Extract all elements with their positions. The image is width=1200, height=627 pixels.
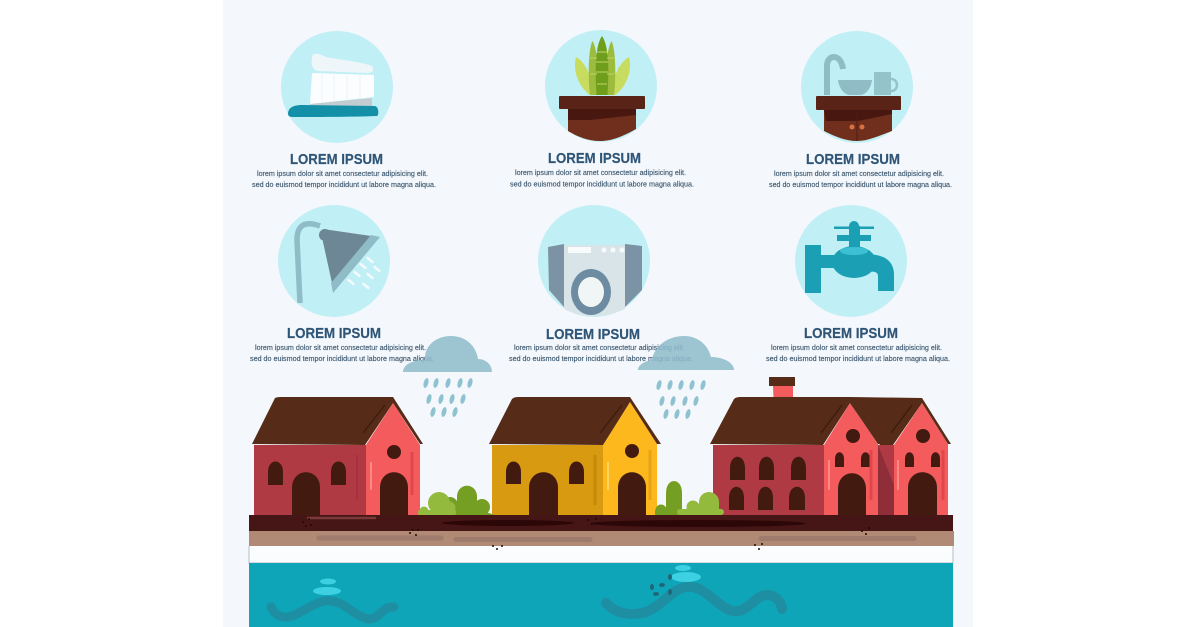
bushes: left [418, 486, 495, 516]
water: underground reservoir [249, 563, 953, 627]
icon: kitchen sink [801, 31, 913, 143]
text block: item 3 [769, 151, 952, 189]
droplet: right upper [675, 565, 691, 571]
text block: item 5: lorem ipsum dolor sit amet consectetur adipisicing elit. [514, 343, 685, 352]
icon: water tap [795, 205, 907, 317]
text block: item 3: LOREM IPSUM [806, 151, 900, 168]
text block: item 1: lorem ipsum dolor sit amet consectetur adipisicing elit. [257, 169, 428, 178]
droplet: left upper [320, 578, 336, 584]
house: red terrace right [710, 377, 951, 515]
dirt specks [650, 574, 672, 596]
icon: shower head [278, 205, 390, 317]
text block: item 4: lorem ipsum dolor sit amet consectetur adipisicing elit. [255, 343, 426, 352]
house: yellow middle [489, 397, 661, 515]
worm: left [271, 601, 394, 619]
text block: item 5: sed do euismod tempor incididunt ut labore magna aliqua. [509, 354, 693, 363]
text block: item 6: lorem ipsum dolor sit amet consectetur adipisicing elit. [771, 343, 942, 352]
droplet: left lower [313, 587, 341, 595]
text block: item 3: lorem ipsum dolor sit amet consectetur adipisicing elit. [774, 169, 944, 178]
panel: page background [223, 0, 973, 627]
text block: item 1: LOREM IPSUM [290, 151, 383, 168]
text block: item 1 [252, 151, 436, 189]
text block: item 4: sed do euismod tempor incididunt ut labore magna aliqua. [250, 354, 434, 363]
text block: item 5 [509, 326, 693, 363]
chimney [769, 377, 795, 409]
bushes: right [655, 481, 724, 516]
text block: item 2 [510, 150, 694, 188]
text block: item 6 [766, 325, 950, 363]
text block: item 4 [250, 325, 434, 363]
text block: item 2: lorem ipsum dolor sit amet consectetur adipisicing elit. [515, 168, 686, 177]
icon: washing machine [538, 205, 650, 317]
ground: soil layers [249, 515, 954, 563]
text block: item 3: sed do euismod tempor incididunt ut labore magna aliqua. [769, 180, 952, 189]
text block: item 4: LOREM IPSUM [287, 325, 381, 342]
icon: toothbrush [281, 31, 393, 143]
icon: rain cloud left [403, 336, 492, 417]
text block: item 6: sed do euismod tempor incididunt ut labore magna aliqua. [766, 354, 950, 363]
worm: right [606, 587, 782, 614]
text block: item 1: sed do euismod tempor incididunt ut labore magna aliqua. [252, 180, 436, 189]
text block: item 6: LOREM IPSUM [804, 325, 898, 342]
house: red left [252, 397, 423, 515]
text block: item 2: sed do euismod tempor incididunt ut labore magna aliqua. [510, 180, 694, 188]
text block: item 5: LOREM IPSUM [546, 326, 640, 343]
droplet: right lower [671, 572, 701, 582]
text block: item 2: LOREM IPSUM [548, 150, 641, 167]
icon: potted plant [545, 30, 657, 142]
icon: rain cloud right [638, 336, 734, 419]
